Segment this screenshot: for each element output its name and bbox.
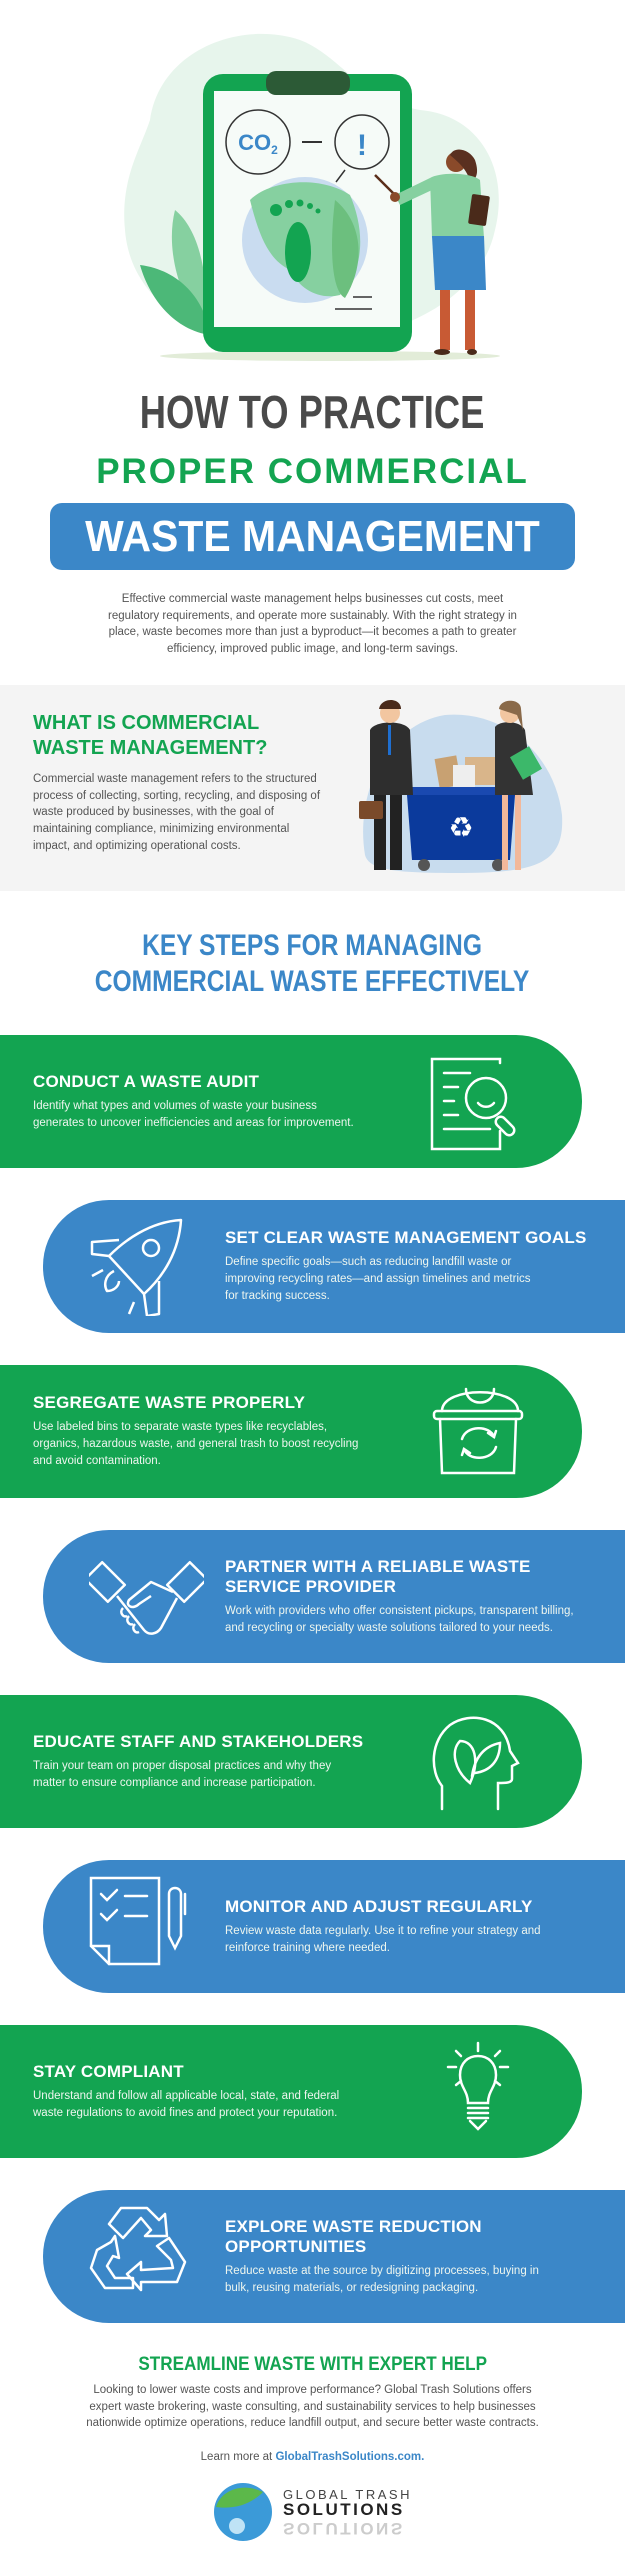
ground shadow [160, 351, 500, 361]
closing text: nationwide optimize operations, reduce landfill output, and secure better waste contracts. [86, 2417, 539, 2429]
step 8: explore waste reduction opportunities [43, 2190, 625, 2323]
step 4: partner with a reliable waste service provider: SERVICE PROVIDER [225, 1577, 396, 1596]
icon: handshake [89, 1560, 204, 1635]
step 1: conduct a waste audit: CONDUCT A WASTE AUDIT [33, 1072, 259, 1091]
clipboard: CO [238, 130, 271, 155]
closing text: expert waste brokering, waste consulting, and sustainability services to help businesses [89, 2400, 536, 2412]
background blob [124, 34, 499, 345]
heading: key steps: COMMERCIAL WASTE EFFECTIVELY [95, 965, 530, 998]
step 7: stay compliant: Understand and follow all applicable local, state, and federal [33, 2090, 339, 2102]
step 6: monitor and adjust regularly [43, 1860, 625, 1993]
heading: key steps: KEY STEPS FOR MANAGING [143, 929, 482, 962]
logo: global trash solutions: GLOBAL TRASH [283, 2487, 412, 2502]
closing text: Looking to lower waste costs and improve performance? Global Trash Solutions offers [93, 2384, 532, 2396]
illustration: business people with recycling bin: ♻ [448, 811, 474, 844]
definition text: maintaining compliance, minimizing environmental [33, 823, 289, 835]
step 7: stay compliant: STAY COMPLIANT [33, 2062, 184, 2081]
step 4: partner with a reliable waste service provider: and recycling or specialty waste solutions tailored to your needs. [225, 1622, 553, 1634]
step 2: set clear waste management goals: SET CLEAR WASTE MANAGEMENT GOALS [225, 1228, 587, 1247]
step 8: explore waste reduction opportunities: OPPORTUNITIES [225, 2237, 366, 2256]
title: how to practice: HOW TO PRACTICE [140, 386, 485, 438]
intro text: place, waste becomes more than just a byproduct—it becomes a path to greater [109, 626, 516, 638]
step 6: monitor and adjust regularly: Review waste data regularly. Use it to refine your strategy and [225, 1925, 541, 1937]
heading: WASTE MANAGEMENT? [33, 737, 267, 759]
definition text: waste produced by businesses, with the goal of [33, 806, 274, 818]
woman presenter [375, 150, 490, 355]
step 1: conduct a waste audit: Identify what types and volumes of waste your business [33, 1100, 317, 1112]
step 3: segregate waste properly: organics, hazardous waste, and general trash to boost recycling [33, 1438, 358, 1450]
definition text: Commercial waste management refers to the structured [33, 773, 317, 785]
heading [33, 712, 267, 759]
step 7: stay compliant [0, 2025, 582, 2158]
step 3: segregate waste properly: and avoid contamination. [33, 1455, 161, 1467]
intro text: Effective commercial waste management helps businesses cut costs, meet [122, 593, 503, 605]
intro text [108, 593, 517, 654]
step 4: partner with a reliable waste service provider: PARTNER WITH A RELIABLE WASTE [225, 1557, 530, 1576]
heading: key steps [95, 929, 530, 998]
step 5: educate staff and stakeholders: EDUCATE STAFF AND STAKEHOLDERS [33, 1732, 363, 1751]
step 7: stay compliant: waste regulations to avoid fines and protect your reputation. [33, 2106, 337, 2118]
clipboard: 2 [271, 143, 278, 157]
logo: global trash solutions [214, 2483, 412, 2541]
step 2: set clear waste management goals: for tracking success. [225, 1290, 330, 1302]
step 4: partner with a reliable waste service provider [43, 1530, 625, 1663]
icon: audit document with magnifier [430, 1058, 516, 1150]
leaves [140, 210, 210, 335]
title: proper commercial: PROPER COMMERCIAL [96, 452, 529, 491]
step 6: monitor and adjust regularly: reinforce training where needed. [225, 1942, 390, 1954]
hero illustration [124, 34, 500, 361]
icon: head with leaves [432, 1716, 520, 1810]
heading: WHAT IS COMMERCIAL [33, 712, 259, 734]
title banner: waste management [50, 503, 575, 570]
title banner: waste management: WASTE MANAGEMENT [85, 512, 540, 561]
step 2: set clear waste management goals [43, 1200, 625, 1333]
illustration: business people with recycling bin [359, 700, 562, 873]
icon: recycle arrows [90, 2206, 186, 2292]
icon: rocket [90, 1218, 182, 1316]
logo: global trash solutions: SOLUTIONS [283, 2519, 405, 2538]
step 4: partner with a reliable waste service provider: Work with providers who offer consistent pickups, transparent billing, [225, 1605, 574, 1617]
step 3: segregate waste properly: SEGREGATE WASTE PROPERLY [33, 1393, 305, 1412]
intro text: efficiency, improved public image, and long-term savings. [167, 642, 458, 654]
icon: checklist and pen [90, 1876, 186, 1966]
step 3: segregate waste properly [0, 1365, 582, 1498]
step 3: segregate waste properly: Use labeled bins to separate waste types like recyclables, [33, 1421, 327, 1433]
step 6: monitor and adjust regularly: MONITOR AND ADJUST REGULARLY [225, 1897, 533, 1916]
definition text: impact, and optimizing operational costs. [33, 840, 241, 852]
heading: streamline waste with expert help: STREAMLINE WASTE WITH EXPERT HELP [138, 2354, 487, 2375]
closing text [86, 2384, 539, 2429]
step 8: explore waste reduction opportunities: Reduce waste at the source by digitizing processes, buying in [225, 2265, 539, 2277]
step 5: educate staff and stakeholders: Train your team on proper disposal practices and why they [33, 1760, 331, 1772]
icon: recycling bin [432, 1388, 524, 1474]
icon: light bulb [446, 2042, 510, 2131]
step 5: educate staff and stakeholders: matter to ensure compliance and increase participation. [33, 1776, 316, 1788]
logo: global trash solutions: SOLUTIONS [283, 2500, 405, 2519]
step 8: explore waste reduction opportunities: bulk, reusing materials, or redesigning packaging. [225, 2282, 478, 2294]
clipboard: ! [357, 129, 367, 162]
step 1: conduct a waste audit [0, 1035, 582, 1168]
definition text [33, 773, 320, 852]
definition text: process of collecting, sorting, recycling, and disposing of [33, 790, 320, 802]
clipboard [203, 71, 412, 352]
intro text: regulatory requirements, and operate more sustainably. With the right strategy in [108, 610, 517, 622]
step 5: educate staff and stakeholders [0, 1695, 582, 1828]
step 2: set clear waste management goals: Define specific goals—such as reducing landfill waste or [225, 1256, 511, 1268]
panel: what is commercial waste management [0, 685, 625, 891]
step 2: set clear waste management goals: improving recycling rates—and assign timelines and metrics [225, 1273, 531, 1285]
step 1: conduct a waste audit: generates to uncover inefficiencies and areas for improvement. [33, 1116, 354, 1128]
step 8: explore waste reduction opportunities: EXPLORE WASTE REDUCTION [225, 2217, 482, 2236]
learn more link: Learn more at GlobalTrashSolutions.com. [201, 2451, 424, 2463]
